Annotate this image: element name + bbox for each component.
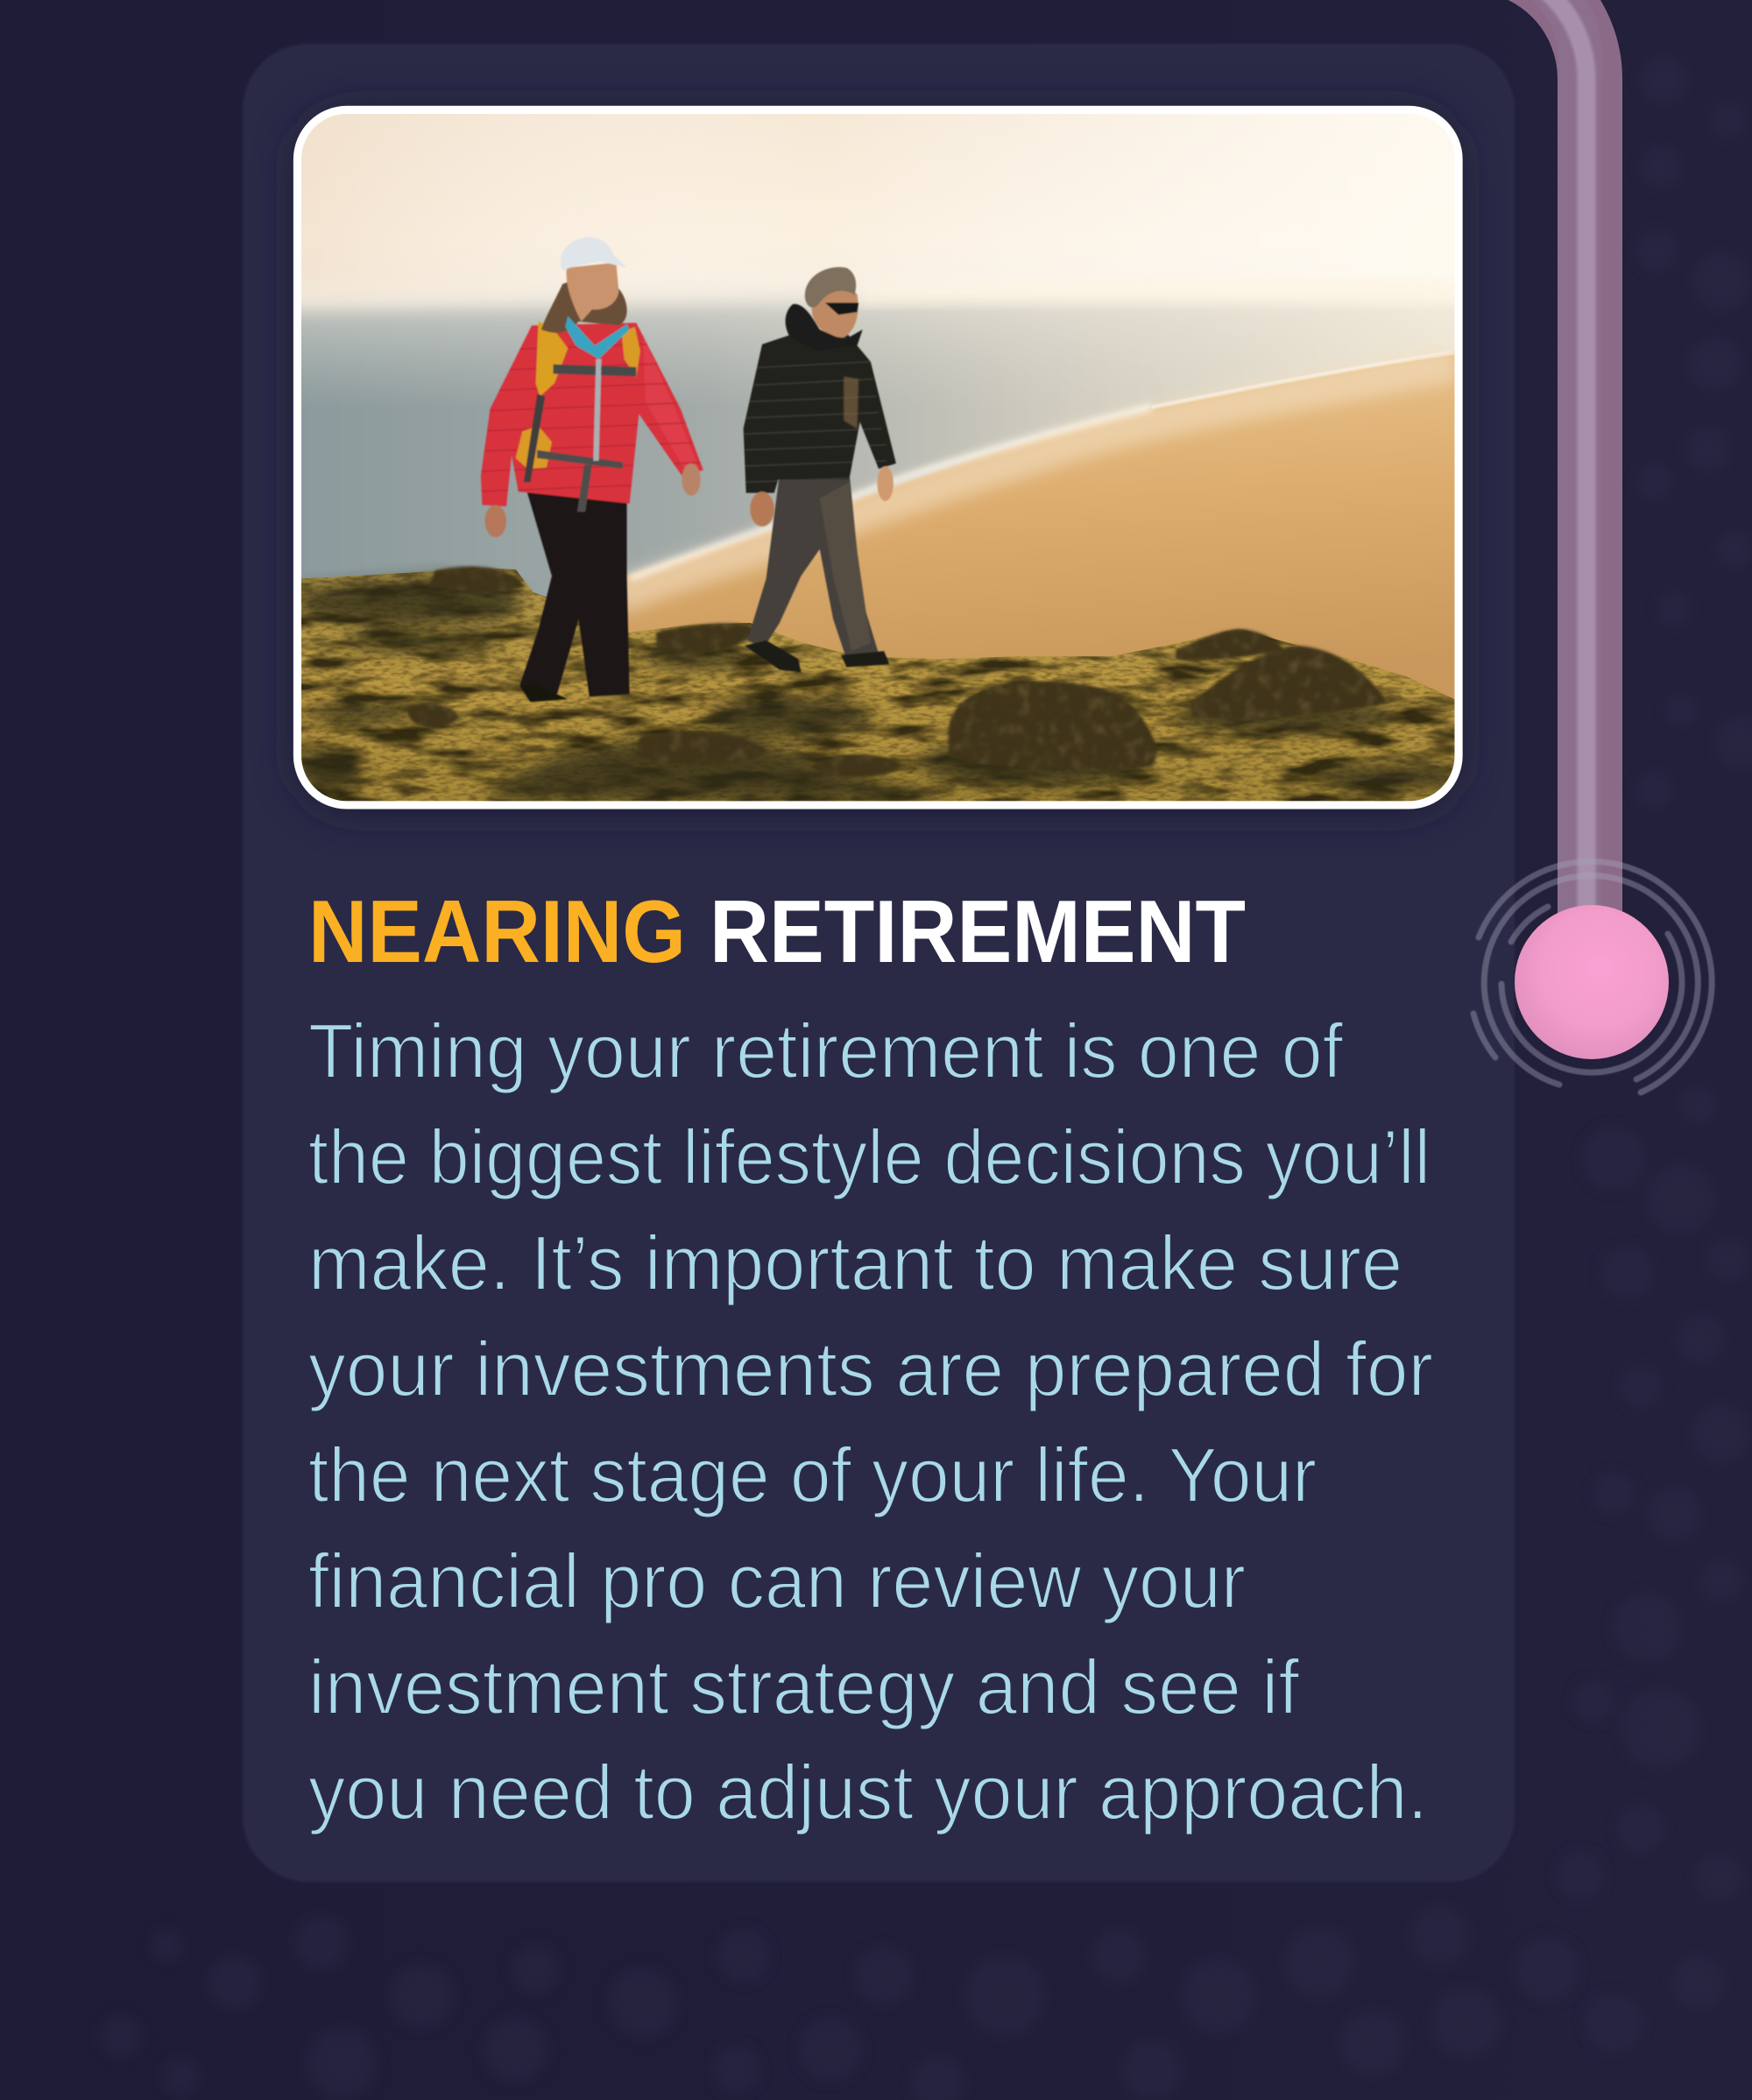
body text: the next stage of your life. Your	[308, 1432, 1317, 1518]
body text: investment strategy and see if	[308, 1644, 1300, 1730]
sea	[301, 282, 1454, 597]
heading: RETIREMENT	[710, 883, 1246, 981]
hiker: woman	[476, 237, 710, 702]
photo: couple hiking above the beach	[255, 106, 1487, 810]
jacket	[744, 329, 896, 493]
hands	[484, 505, 506, 537]
photo shadow on card	[298, 112, 1458, 810]
hands	[750, 491, 774, 527]
connector tube	[1470, 0, 1590, 920]
backpack	[516, 426, 552, 469]
trousers	[747, 471, 879, 659]
infographic: nearing retirement card	[244, 0, 1715, 1882]
body text: your investments are prepared for	[308, 1326, 1433, 1412]
body text: the biggest lifestyle decisions you’ll	[308, 1114, 1431, 1200]
node: signal rings	[1473, 861, 1712, 1092]
head	[812, 284, 858, 337]
body text: financial pro can review your	[308, 1538, 1246, 1624]
heading: NEARING	[308, 883, 686, 981]
straps	[524, 394, 545, 482]
cap	[561, 237, 627, 271]
grassy headland	[296, 567, 1473, 801]
trousers	[519, 484, 630, 696]
sky	[301, 114, 1454, 314]
jacket	[481, 322, 703, 506]
beach	[590, 351, 1454, 710]
face	[567, 263, 618, 322]
node: pink ball	[1515, 905, 1669, 1059]
hiker: man	[744, 267, 896, 673]
shoes	[745, 640, 801, 673]
body text: Timing your retirement is one of	[308, 1008, 1344, 1094]
ground shadows	[296, 576, 1473, 801]
collar	[565, 316, 630, 359]
body text: make. It’s important to make sure	[308, 1220, 1402, 1306]
heading	[308, 883, 1246, 981]
body text	[308, 1008, 1433, 1835]
hair	[541, 274, 627, 333]
body text: you need to adjust your approach.	[308, 1749, 1428, 1835]
rocks	[407, 567, 1388, 777]
panel: card	[243, 44, 1515, 1882]
